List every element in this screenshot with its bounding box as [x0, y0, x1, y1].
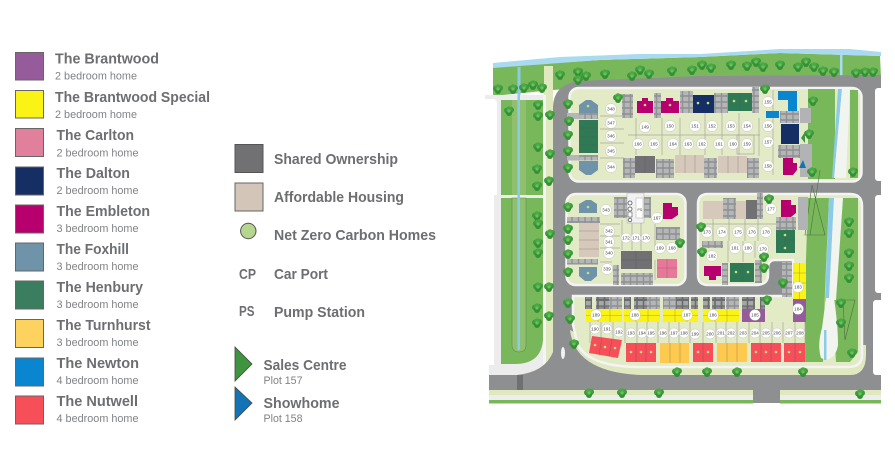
plot numbers: lower right block: 174 [718, 230, 726, 235]
plot numbers: top block: 155 [764, 100, 772, 105]
legend item: Sales Centre [235, 347, 346, 387]
south verge and path [489, 390, 881, 404]
drain crossing top verge [518, 67, 520, 97]
canal water strip [493, 49, 881, 68]
house plots [579, 91, 806, 363]
plot numbers: lower right block: 175 [734, 230, 742, 235]
plot numbers: lower left block: 169 [656, 246, 664, 251]
plot numbers: south terrace: 190 [591, 327, 599, 332]
plot numbers: south terrace: 188 [631, 313, 639, 318]
estate road south arm details [561, 347, 565, 359]
pale verge along lower block [570, 330, 866, 375]
plot numbers: lower right block: 179 [759, 247, 767, 252]
plot numbers: south terrace: 200 [706, 332, 714, 337]
block: top [570, 88, 862, 182]
net zero markers [587, 100, 801, 353]
legend item: The Dalton: 2 bedroom home [56, 185, 138, 197]
plot numbers: lower left block: 342 [605, 229, 613, 234]
legend item: The Brantwood Special: 2 bedroom home [55, 109, 137, 121]
legend item: The Dalton: The Dalton [56, 165, 130, 182]
plot numbers: top block: 153 [727, 124, 735, 129]
legend item: Showhome: Plot 158 [264, 413, 302, 425]
plot numbers: top block: 348 [607, 107, 615, 112]
legend item: The Carlton [16, 127, 138, 160]
newton plots [766, 91, 797, 118]
legend item: Pump Station: Pump Station [274, 304, 365, 321]
legend item: The Brantwood Special: The Brantwood Special [55, 89, 210, 106]
plot numbers: south terrace: 204 [751, 331, 759, 336]
plot numbers: lower right block [702, 204, 776, 262]
dalton plots [693, 95, 799, 144]
legend item: Sales Centre: Sales Centre [264, 357, 346, 374]
plot numbers: lower left block: 339 [603, 267, 611, 272]
plot numbers: lower left block: 167 [653, 216, 661, 221]
plot numbers: top block: 163 [684, 142, 692, 147]
plot numbers: top block: 346 [607, 134, 615, 139]
legend item: Car Port [239, 266, 328, 283]
embleton plots [637, 98, 797, 280]
legend item: The Henbury [16, 279, 144, 311]
plot numbers: top block: 166 [634, 142, 642, 147]
legend item: The Foxhill [16, 241, 138, 273]
plot numbers: south terrace: 183 [794, 285, 802, 290]
icon: sales centre marker [801, 132, 805, 143]
legend item: The Embleton: The Embleton [56, 203, 150, 220]
legend item: Car Port: Car Port [274, 266, 328, 283]
legend item: The Turnhurst [16, 317, 151, 349]
plot numbers: south terrace: 187 [683, 313, 691, 318]
plot numbers: lower left block: 170 [642, 236, 650, 241]
legend item: The Nutwell [16, 393, 138, 425]
right edge cut-outs [873, 40, 895, 420]
legend item: The Nutwell: The Nutwell [56, 393, 138, 410]
plot numbers: top block: 158 [764, 164, 772, 169]
plot numbers: top block: 157 [764, 140, 772, 145]
plot numbers: lower right block: 181 [731, 246, 739, 251]
plot numbers: top block: 164 [669, 142, 677, 147]
legend item: The Foxhill: 3 bedroom home [56, 261, 138, 273]
PS compound [627, 193, 644, 223]
car ports [567, 87, 800, 297]
road network [489, 75, 881, 403]
legend item: The Turnhurst: The Turnhurst [56, 317, 151, 334]
legend item: The Embleton: 3 bedroom home [56, 223, 138, 235]
legend item: Showhome: Showhome [264, 395, 340, 412]
plot numbers: south terrace: 201 [717, 331, 725, 336]
plot numbers: south terrace: 198 [680, 331, 688, 336]
legend item: The Embleton [16, 203, 150, 235]
plot numbers: lower right block: 180 [744, 246, 752, 251]
left linear park [485, 66, 553, 376]
plot numbers: south terrace: 208 [796, 331, 804, 336]
pedestrian crossing [517, 375, 523, 390]
plot numbers: south terrace: 205 [762, 331, 770, 336]
legend item: The Carlton: 2 bedroom home [56, 148, 138, 160]
trees [493, 57, 878, 399]
east park [805, 89, 858, 362]
plot numbers: top block [606, 96, 774, 172]
legend item: The Newton: 4 bedroom home [56, 375, 138, 387]
legend item: Affordable Housing [235, 183, 404, 211]
henbury plots [579, 93, 795, 282]
legend item: The Nutwell: 4 bedroom home [56, 413, 138, 425]
legend item: Pump Station: PS [239, 303, 254, 320]
legend item: The Brantwood: The Brantwood [55, 50, 159, 68]
fences and garden lines [590, 90, 805, 362]
plot numbers: top block: 345 [607, 149, 615, 154]
legend item: The Brantwood: 2 bedroom home [55, 70, 137, 82]
legend item: Showhome [235, 387, 340, 425]
legend item: Pump Station [239, 303, 365, 321]
plot numbers: top block: 149 [641, 125, 649, 130]
plot numbers: top block: 344 [607, 165, 615, 170]
plot numbers: lower right block: 177 [767, 207, 775, 212]
plot numbers: south terrace: 184 [794, 307, 802, 312]
plot numbers: top block: 151 [691, 124, 699, 129]
plot numbers: lower right block: 173 [703, 230, 711, 235]
plot numbers: top block: 150 [666, 124, 674, 129]
plot numbers: lower left block: 171 [632, 236, 640, 241]
plot numbers: lower left block [600, 204, 678, 274]
legend item: The Brantwood Special [16, 89, 210, 121]
legend item: The Brantwood [16, 50, 159, 82]
affordable housing plots [579, 155, 747, 257]
legend item: The Foxhill: The Foxhill [56, 241, 129, 258]
plot numbers: top block: 162 [698, 142, 706, 147]
plot numbers: south terrace: 196 [659, 331, 667, 336]
legend item: The Henbury: 3 bedroom home [56, 299, 138, 311]
carlton plots [657, 259, 677, 278]
legend item: Sales Centre: Plot 157 [264, 375, 302, 387]
plot numbers: south terrace: 197 [670, 331, 678, 336]
legend: house types [16, 50, 210, 425]
site plan map [485, 40, 895, 420]
plot numbers: south terrace: 192 [615, 330, 623, 335]
plot numbers: south terrace: 195 [647, 331, 655, 336]
legend item: Shared Ownership: Shared Ownership [274, 151, 398, 168]
grey paved drives [798, 108, 812, 230]
block: lower left [566, 194, 686, 285]
block: lower right and south terrace [573, 194, 862, 367]
plot numbers: top block: 160 [729, 142, 737, 147]
plot numbers: south terrace: 207 [785, 331, 793, 336]
legend item: The Carlton: The Carlton [56, 127, 134, 144]
plot numbers: top block: 159 [743, 142, 751, 147]
plot numbers: south terrace: 199 [691, 332, 699, 337]
top green verge [493, 53, 881, 96]
PS compound: PS [638, 208, 643, 212]
legend item: The Newton: The Newton [56, 355, 139, 372]
legend item: The Newton [16, 355, 139, 387]
car ports: south terrace row [585, 297, 765, 309]
brantwood special plots [586, 263, 806, 322]
plot numbers: lower right block: 182 [708, 254, 716, 259]
legend item: Shared Ownership [235, 144, 398, 172]
plot numbers: lower left block: 172 [622, 236, 630, 241]
plot numbers: top block: 161 [715, 142, 723, 147]
plot numbers: south terrace: 193 [627, 331, 635, 336]
legend item: The Henbury: The Henbury [56, 279, 144, 296]
plot numbers: top block: 156 [764, 124, 772, 129]
brantwood plots [742, 299, 806, 322]
legend item: Net Zero Carbon Homes: Net Zero Carbon Homes [274, 227, 436, 244]
plot numbers: south terrace: 185 [751, 313, 759, 318]
nutwell plots [589, 336, 805, 362]
plot numbers: top block: 154 [743, 124, 751, 129]
legend: tenure and site features [235, 144, 436, 425]
plot numbers: south terrace: 191 [603, 327, 611, 332]
legend item: Affordable Housing: Affordable Housing [274, 189, 404, 206]
legend item: Car Port: CP [239, 266, 256, 283]
legend item: The Dalton [16, 165, 138, 197]
plot numbers: lower left block: 168 [668, 246, 676, 251]
plot numbers: lower right block: 178 [762, 230, 770, 235]
plot numbers: south terrace: 186 [709, 313, 717, 318]
icon: showhome marker [799, 160, 806, 168]
legend item: The Turnhurst: 3 bedroom home [56, 337, 138, 349]
plot numbers: top block: 152 [708, 124, 716, 129]
legend item: Net Zero Carbon Homes [241, 223, 436, 244]
plot numbers: lower right block: 176 [748, 230, 756, 235]
party walls [579, 93, 806, 363]
foxhill plots [579, 100, 598, 281]
plot numbers: lower left block: 341 [605, 240, 613, 245]
plot numbers: south terrace: 189 [592, 313, 600, 318]
plot numbers: lower left block: 340 [605, 251, 613, 256]
turnhurst plots [660, 343, 747, 363]
plot numbers: south terrace: 194 [638, 331, 646, 336]
plot numbers: south terrace: 206 [773, 331, 781, 336]
plot numbers: south terrace [590, 282, 805, 339]
plot numbers: top block: 347 [607, 121, 615, 126]
plot numbers: south terrace: 202 [727, 331, 735, 336]
plot numbers: lower left block: 343 [602, 208, 610, 213]
shared ownership plots [621, 156, 757, 269]
plot numbers: south terrace: 203 [739, 331, 747, 336]
plot numbers: top block: 165 [650, 142, 658, 147]
